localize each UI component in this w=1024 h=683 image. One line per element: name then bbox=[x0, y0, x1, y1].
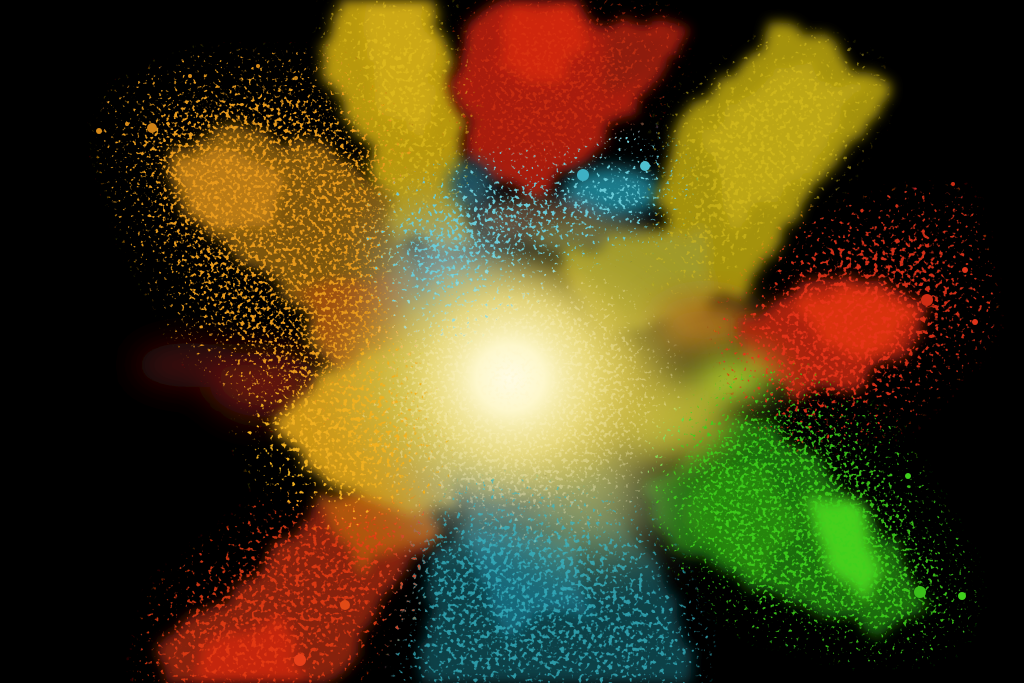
plume: red and orange lower left bbox=[160, 470, 440, 683]
particles: golden spray left of centre bbox=[265, 360, 420, 500]
particles: cyan spray bottom centre bbox=[410, 510, 680, 683]
core: white hot centre bbox=[375, 248, 645, 508]
particles: green spray lower right bbox=[680, 395, 950, 630]
plume: lime green right of centre bbox=[610, 352, 777, 460]
halo: broad yellow haze bbox=[350, 215, 680, 555]
plume: dark red left haze bbox=[135, 343, 320, 417]
particles: red spray right bbox=[745, 215, 965, 420]
particles: red spray lower left bbox=[165, 510, 400, 675]
plume: teal bottom centre bbox=[420, 500, 700, 683]
plume: red top centre bbox=[452, 0, 690, 205]
particles: pale dust across centre bbox=[390, 290, 650, 510]
particles: orange spray upper left bbox=[125, 85, 390, 400]
particles: grain over upper plumes bbox=[350, 20, 860, 270]
particles: cyan spray top centre bbox=[395, 160, 655, 310]
plume: green lower right bbox=[650, 420, 930, 635]
centre glow bbox=[350, 215, 680, 555]
plume: teal upper centre bbox=[448, 161, 660, 256]
particles: dark grain over red plume bbox=[480, 15, 660, 180]
plume: red right bbox=[740, 280, 925, 400]
plume: orange bridge right of centre bbox=[650, 295, 760, 355]
particles: individual stray specks bbox=[96, 64, 978, 666]
plume: yellow top centre bbox=[325, 0, 470, 250]
plume: olive yellow upper right bbox=[560, 25, 890, 340]
plume: golden lower left of centre bbox=[272, 340, 470, 510]
plume: orange upper left bbox=[165, 125, 430, 400]
